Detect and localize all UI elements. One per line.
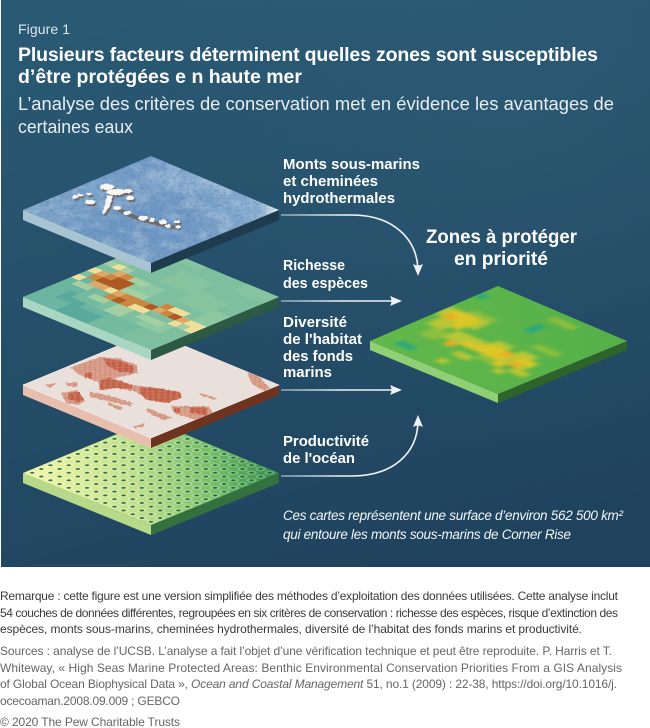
label: seamounts and vents: hydrothermales — [283, 190, 395, 207]
heading: priority zones: Zones à protéger — [426, 226, 577, 248]
note text: espèces, monts sous-marins, cheminées hydrothermales, diversité de l’habitat des fonds marins et productivité. — [0, 622, 582, 636]
note text: 54 couches de données différentes, regroupées en six critères de conservation : richesse des espèces, risque d’extinction des — [0, 606, 618, 620]
heading: priority zones — [426, 226, 577, 270]
panel: dark ocean background — [1, 0, 650, 567]
arrow: species richness to priority zones — [281, 296, 402, 306]
label: species richness — [283, 257, 368, 292]
layer: species richness map — [23, 244, 279, 360]
caption: map area note — [283, 508, 624, 542]
layer: ocean productivity map — [23, 420, 279, 535]
arrow: productivity to priority zones — [281, 415, 423, 476]
subtitle — [18, 93, 614, 137]
subtitle: L’analyse des critères de conservation met en évidence les avantages de — [18, 93, 614, 114]
label: ocean productivity: Productivité — [283, 433, 369, 450]
label: seabed habitat diversity: de l'habitat — [283, 331, 362, 348]
sources text — [0, 644, 622, 708]
caption: map area note: qui entoure les monts sous-marins de Corner Rise — [283, 527, 571, 542]
arrow: habitat diversity to priority zones — [281, 385, 402, 395]
note text: Remarque : cette figure est une version simplifiée des méthodes d’exploitation des données utilisées. Cette analyse inclut — [0, 589, 619, 603]
arrow: seamounts to priority zones — [281, 215, 423, 276]
subtitle: certaines eaux — [18, 116, 134, 137]
layer: priority zones map — [370, 286, 627, 403]
title: d’être protégées e n haute mer — [18, 66, 302, 88]
sources text: Whiteway, « High Seas Marine Protected Areas: Benthic Environmental Conservation Priorities From a GIS Analysis — [0, 661, 622, 675]
sources text: ocecoaman.2008.09.009 ; GEBCO — [0, 694, 180, 708]
label: species richness: des espèces — [283, 275, 368, 292]
sources text: of Global Ocean Biophysical Data », Ocean and Coastal Management 51, no.1 (2009) : 22-38, https://doi.org/10.1016/j. — [0, 677, 617, 691]
label: seamounts and vents: Monts sous-marins — [283, 156, 420, 173]
layer: seamounts and hydrothermal vents map — [23, 156, 279, 273]
label: seabed habitat diversity — [283, 314, 362, 381]
label: seabed habitat diversity: des fonds — [283, 348, 353, 365]
note text — [0, 589, 619, 636]
label: seamounts and vents — [283, 156, 420, 207]
label: ocean productivity: de l'océan — [283, 450, 355, 467]
title: Plusieurs facteurs déterminent quelles zones sont susceptibles — [18, 44, 598, 66]
title — [18, 44, 598, 88]
label: ocean productivity — [283, 433, 369, 467]
sources text: Sources : analyse de l’UCSB. L’analyse a fait l’objet d’une vérification technique et peut être reproduite. P. Harris et T. — [0, 644, 612, 658]
label: seabed habitat diversity: marins — [283, 364, 332, 381]
figure label: Figure 1 — [18, 21, 70, 37]
label: species richness: Richesse — [283, 257, 345, 274]
layer: seabed habitat diversity map — [23, 332, 279, 448]
heading: priority zones: en priorité — [454, 248, 548, 270]
caption: map area note: Ces cartes représentent une surface d’environ 562 500 km² — [283, 508, 624, 523]
label: seabed habitat diversity: Diversité — [283, 314, 347, 331]
label: seamounts and vents: et cheminées — [283, 173, 378, 190]
